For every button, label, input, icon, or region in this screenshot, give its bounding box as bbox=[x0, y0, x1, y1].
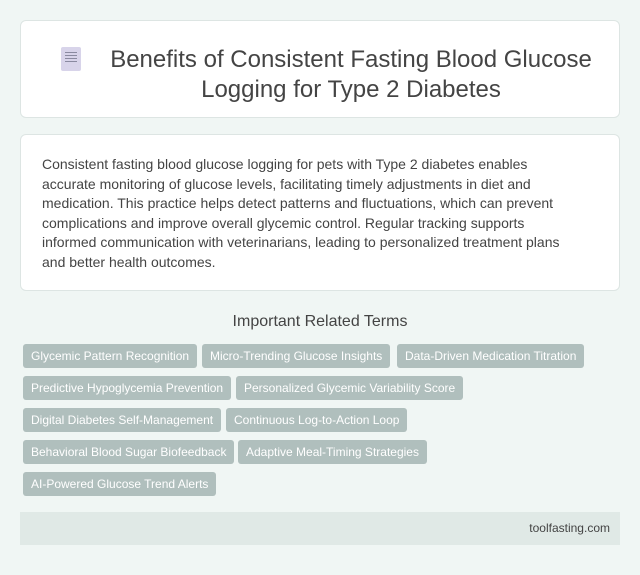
tags: Adaptive Meal-Timing Strategies bbox=[246, 445, 419, 459]
tags: Micro-Trending Glucose Insights bbox=[210, 349, 382, 363]
footer bbox=[20, 512, 620, 545]
tags: Behavioral Blood Sugar Biofeedback bbox=[31, 445, 226, 459]
tags: Personalized Glycemic Variability Score bbox=[244, 381, 455, 395]
description text: Consistent fasting blood glucose logging for pets with Type 2 diabetes enables accurate monitoring of glucose levels, facilitating timely adjustments in diet and medication. This practice helps detect patterns and fluctuations, which can prevent complications and improve overall glycemic control. Regular tracking supports informed communication with veterinarians, leading to personalized treatment plans and better health outcomes. bbox=[42, 156, 560, 270]
tags: Glycemic Pattern Recognition bbox=[31, 349, 189, 363]
tags: Data-Driven Medication Titration bbox=[405, 349, 576, 363]
tags: AI-Powered Glucose Trend Alerts bbox=[31, 477, 208, 491]
tags: Predictive Hypoglycemia Prevention bbox=[31, 381, 223, 395]
tags: Continuous Log-to-Action Loop bbox=[234, 413, 399, 427]
tags: Digital Diabetes Self-Management bbox=[31, 413, 213, 427]
header card bbox=[20, 20, 620, 118]
section heading: Important Related Terms bbox=[233, 313, 407, 330]
footer: toolfasting.com bbox=[529, 521, 610, 535]
description card bbox=[20, 134, 620, 291]
icon: document bbox=[61, 47, 81, 71]
title: Benefits of Consistent Fasting Blood Glucose Logging for Type 2 Diabetes bbox=[110, 46, 592, 103]
